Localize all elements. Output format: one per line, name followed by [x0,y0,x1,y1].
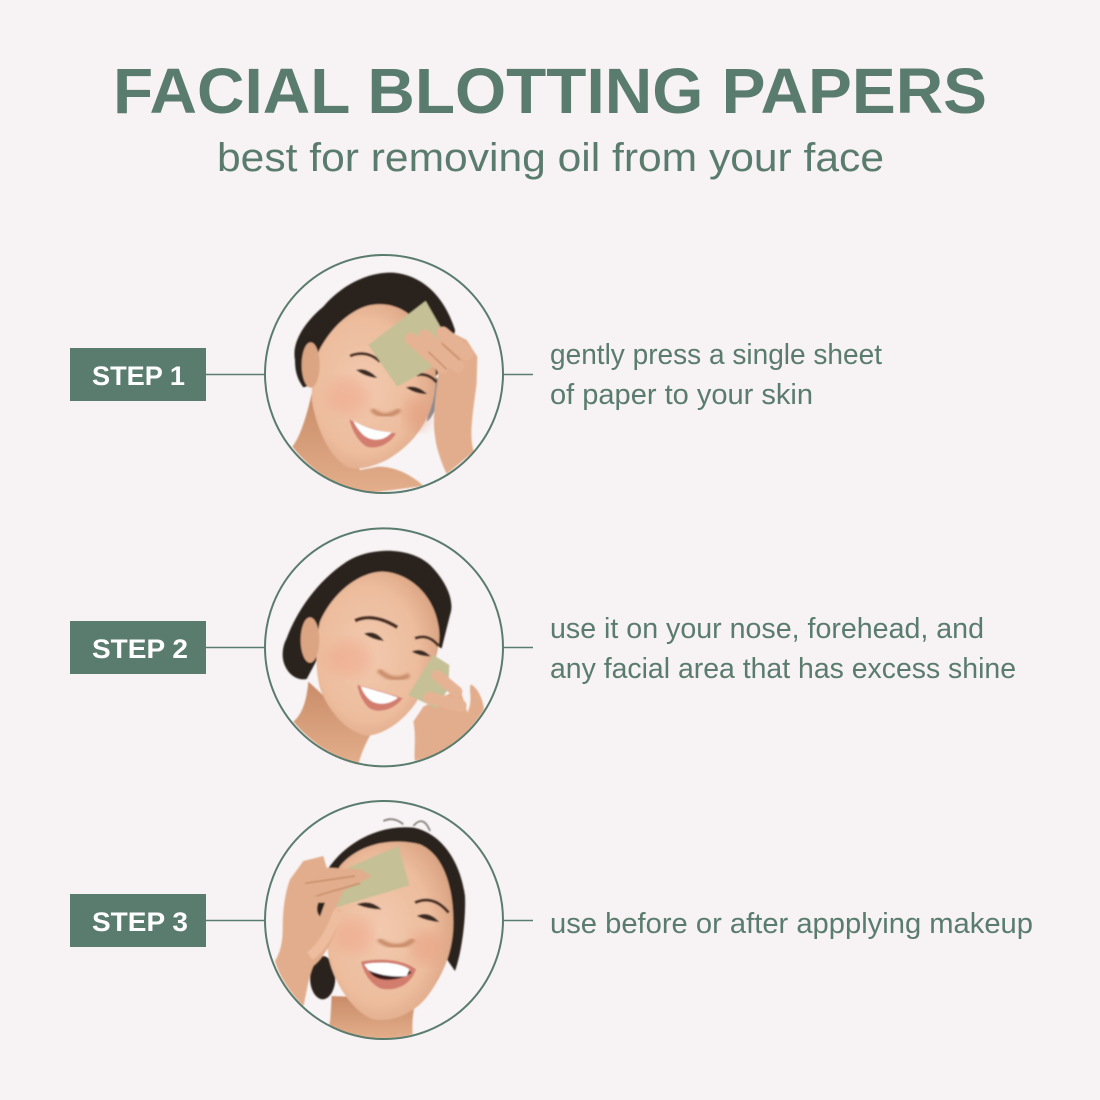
step 3 photo: woman holding paper on forehead [265,801,503,1039]
step 1 text: of paper to your skin [550,379,813,411]
step 2 row [70,528,1016,766]
step 2 label: STEP 2 [92,634,188,664]
title: FACIAL BLOTTING PAPERS [113,55,987,127]
step 1 label [70,348,206,401]
step 2 label [70,621,206,674]
step 1 photo: woman pressing paper to forehead [265,255,503,493]
step 2 text [550,613,1016,685]
step 1 text [550,339,882,411]
step 1 label: STEP 1 [92,361,185,391]
step 1 text: gently press a single sheet [550,339,882,371]
step 2 text: any facial area that has excess shine [550,653,1016,685]
step 3 text: use before or after appplying makeup [550,908,1033,940]
step 2 text: use it on your nose, forehead, and [550,613,984,645]
step 3 label: STEP 3 [92,907,188,937]
step 3 label [70,894,206,947]
step 3 row [70,801,1033,1039]
step 2 photo: woman dabbing paper on cheek [265,528,503,766]
step 1 row [70,255,882,493]
subtitle: best for removing oil from your face [217,136,884,180]
